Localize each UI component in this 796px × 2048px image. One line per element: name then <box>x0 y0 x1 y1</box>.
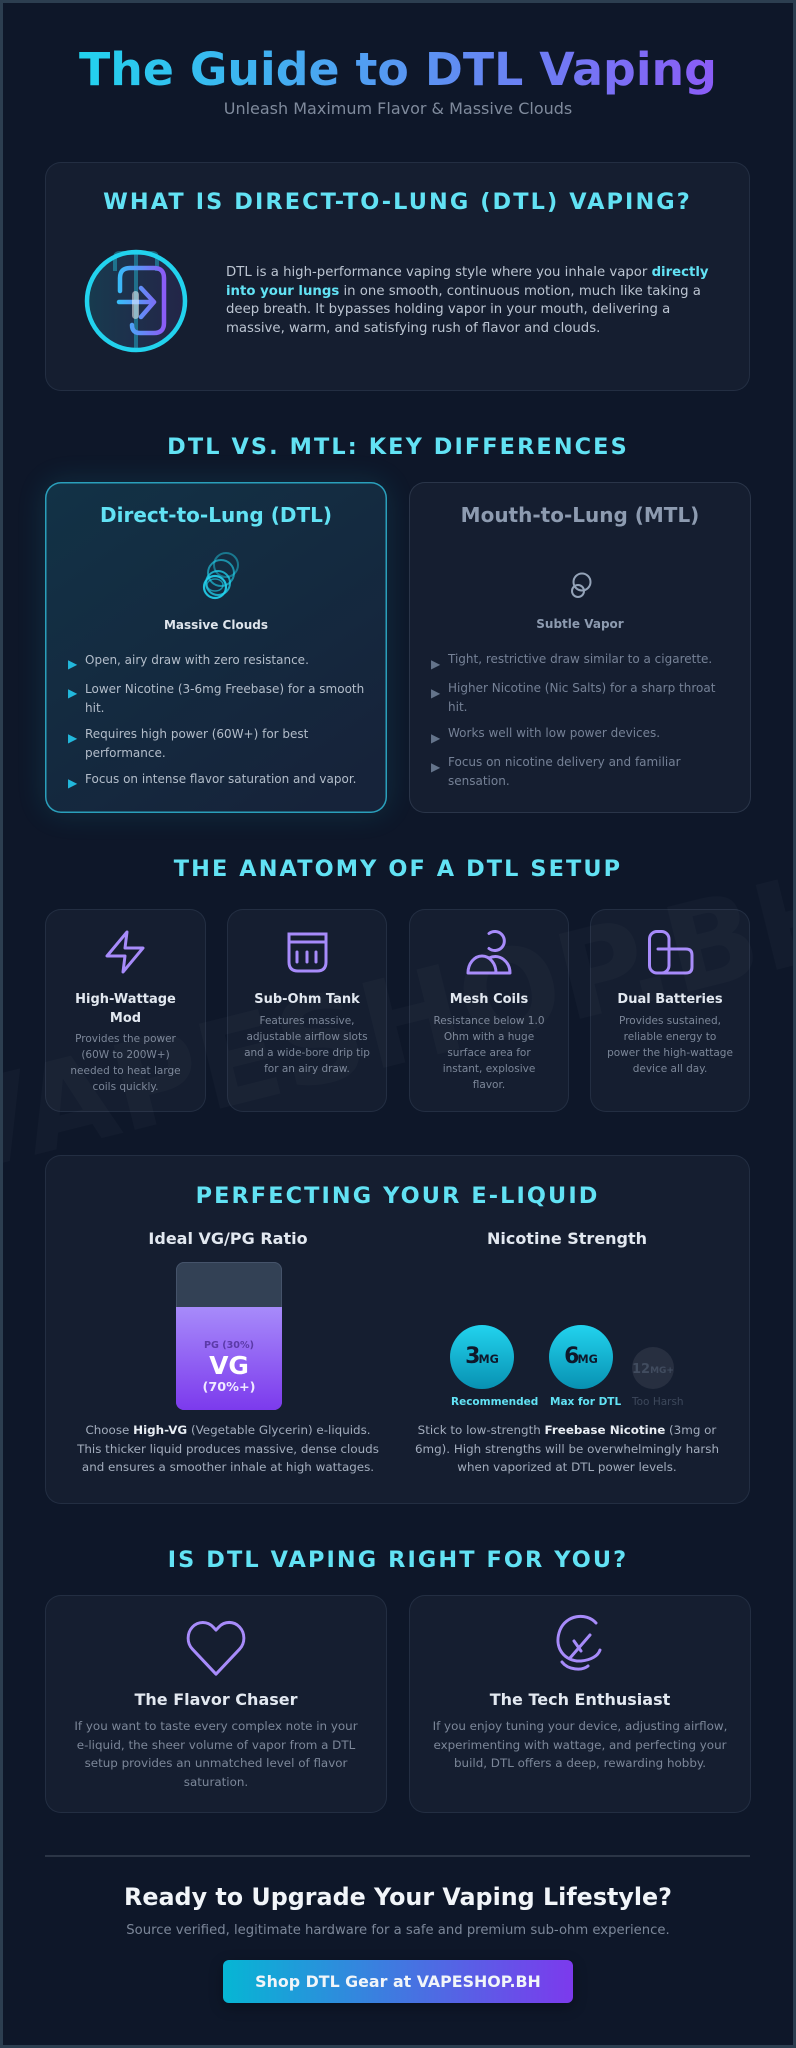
coils text: surface area for <box>447 1047 531 1059</box>
MTL bullet list: sensation. <box>448 774 510 788</box>
panel: what is DTL <box>45 162 750 391</box>
DTL bullet list: ▶ <box>68 657 77 671</box>
ratio text: and ensures a smoother inhale at high wattages. <box>82 1460 374 1474</box>
MTL bullet list: Focus on nicotine delivery and familiar <box>448 755 681 769</box>
ratio text: This thicker liquid produces massive, dense clouds <box>77 1442 379 1456</box>
subtle vapor label: Subtle Vapor <box>536 617 624 631</box>
DTL bullet list: ▶ <box>68 731 77 745</box>
mod title: High-Wattage <box>75 992 176 1007</box>
nicotine heading: Nicotine Strength <box>487 1229 647 1248</box>
subtitle: Unleash Maximum Flavor & Massive Clouds <box>224 99 572 118</box>
flavor text: e-liquid, the sheer volume of vapor from a DTL <box>77 1738 355 1752</box>
MTL title: Mouth-to-Lung (MTL) <box>461 503 699 527</box>
title: The Guide to DTL Vaping <box>79 42 717 96</box>
mod text <box>70 1033 181 1093</box>
panel: DTL card <box>45 482 387 813</box>
icon: batteries <box>648 930 694 974</box>
ratio text: Choose High-VG (Vegetable Glycerin) e-liquids. <box>85 1423 371 1437</box>
CTA text: Source verified, legitimate hardware for a safe and premium sub-ohm experience. <box>126 1923 670 1938</box>
tank text <box>244 1015 370 1075</box>
massive clouds label: Massive Clouds <box>164 618 268 632</box>
heading: what is DTL: WHAT IS DIRECT-TO-LUNG (DTL) VAPING? <box>103 189 692 215</box>
DTL bullet list: performance. <box>85 746 166 760</box>
flavor text <box>74 1719 358 1789</box>
nicotine 3mg <box>450 1325 514 1389</box>
MTL bullet list <box>431 652 716 788</box>
mod text: coils quickly. <box>93 1081 158 1093</box>
tech title: The Tech Enthusiast <box>490 1690 670 1709</box>
mod text: needed to heat large <box>70 1065 181 1077</box>
intro text: deep breath. It bypasses holding vapor in your mouth, delivering a <box>226 302 670 317</box>
coils text: instant, explosive <box>443 1063 535 1075</box>
panel: MTL card <box>409 482 751 813</box>
mod text: (60W to 200W+) <box>81 1049 170 1061</box>
mod title <box>75 992 176 1026</box>
MTL bullet list: ▶ <box>431 657 440 671</box>
DTL bullet list <box>68 653 364 790</box>
nicotine 12mg <box>632 1347 674 1389</box>
MTL bullet list: ▶ <box>431 731 440 745</box>
tech text: build, DTL offers a deep, rewarding hobby. <box>454 1756 706 1770</box>
nicotine text <box>415 1423 719 1474</box>
ratio text <box>77 1423 379 1474</box>
panel: high-wattage mod <box>45 909 206 1112</box>
icon: massive clouds <box>202 552 239 600</box>
coils text: Ohm with a huge <box>444 1031 534 1043</box>
heading: differences: DTL VS. MTL: KEY DIFFERENCES <box>167 434 629 460</box>
heading: right for you: IS DTL VAPING RIGHT FOR YOU? <box>168 1547 628 1573</box>
MTL bullet list: Works well with low power devices. <box>448 726 660 740</box>
CTA button <box>223 1960 573 2003</box>
DTL bullet list: hit. <box>85 701 104 715</box>
batteries text: reliable energy to <box>624 1031 716 1043</box>
nicotine text: 6mg). High strengths will be overwhelmingly harsh <box>415 1442 719 1456</box>
nicotine 12mg: 12MG+ <box>632 1362 674 1377</box>
panel: dual batteries <box>590 909 750 1112</box>
divider <box>45 1855 750 1857</box>
tech text <box>433 1719 727 1770</box>
nicotine labels <box>451 1396 684 1408</box>
intro text: DTL is a high-performance vaping style where you inhale vapor directly <box>226 265 709 280</box>
batteries text: power the high-wattage <box>607 1047 733 1059</box>
nicotine labels: Max for DTL <box>550 1396 621 1408</box>
nicotine labels: Recommended <box>451 1396 538 1408</box>
panel: flavor chaser <box>45 1595 387 1813</box>
DTL title: Direct-to-Lung (DTL) <box>100 503 332 527</box>
coils title: Mesh Coils <box>450 992 528 1007</box>
VG fill <box>176 1307 282 1410</box>
MTL bullet list: Tight, restrictive draw similar to a cigarette. <box>448 652 712 666</box>
tech text: experimenting with wattage, and perfecting your <box>433 1738 727 1752</box>
ratio heading: Ideal VG/PG Ratio <box>148 1229 308 1248</box>
icon: heart <box>186 1620 246 1676</box>
tank text: and a wide-bore drip tip <box>244 1047 370 1059</box>
flavor text: If you want to taste every complex note in your <box>74 1719 358 1733</box>
mod title: Mod <box>110 1010 141 1026</box>
nicotine 6mg: 6MG <box>564 1344 598 1369</box>
tech text: If you enjoy tuning your device, adjusting airflow, <box>433 1719 727 1733</box>
intro text: into your lungs in one smooth, continuous motion, much like taking a <box>226 284 701 299</box>
MTL bullet list: ▶ <box>431 686 440 700</box>
nicotine text: when vaporized at DTL power levels. <box>457 1460 677 1474</box>
MTL bullet list: ▶ <box>431 760 440 774</box>
MTL bullet list: Higher Nicotine (Nic Salts) for a sharp throat <box>448 681 715 695</box>
nicotine labels: Too Harsh <box>632 1396 684 1408</box>
panel: sub-ohm tank <box>227 909 387 1112</box>
DTL bullet list: Requires high power (60W+) for best <box>85 727 308 741</box>
icon: tank <box>288 932 328 972</box>
CTA heading: Ready to Upgrade Your Vaping Lifestyle? <box>124 1883 672 1911</box>
icon: coils <box>466 930 512 974</box>
mod text: Provides the power <box>75 1033 176 1045</box>
VG label: VG <box>209 1351 249 1380</box>
coils text: Resistance below 1.0 <box>433 1015 544 1027</box>
flavor text: setup provides an unmatched level of flavor <box>85 1756 347 1770</box>
panel: tech enthusiast <box>409 1595 751 1813</box>
PG label: PG (30%) <box>204 1340 254 1351</box>
icon: gauge <box>556 1614 602 1671</box>
DTL bullet list: Open, airy draw with zero resistance. <box>85 653 309 667</box>
panel: mesh coils <box>409 909 569 1112</box>
VG percent: (70%+) <box>202 1380 256 1395</box>
coils text <box>433 1015 544 1091</box>
nicotine 6mg <box>549 1325 613 1389</box>
DTL bullet list: Lower Nicotine (3-6mg Freebase) for a smooth <box>85 682 364 696</box>
icon: subtle vapor <box>571 572 592 598</box>
tank text: for an airy draw. <box>264 1063 350 1075</box>
intro text <box>226 265 709 336</box>
tank title: Sub-Ohm Tank <box>254 992 360 1007</box>
batteries text: device all day. <box>633 1063 707 1075</box>
DTL bullet list: ▶ <box>68 686 77 700</box>
DTL bullet list: Focus on intense flavor saturation and vapor. <box>85 772 356 786</box>
DTL bullet list: ▶ <box>68 776 77 790</box>
intro text: massive, warm, and satisfying rush of flavor and clouds. <box>226 321 600 336</box>
bottle chart <box>176 1262 282 1410</box>
icon: bolt <box>105 930 145 974</box>
heading: anatomy: THE ANATOMY OF A DTL SETUP <box>174 856 622 882</box>
flavor text: saturation. <box>184 1775 248 1789</box>
tank text: Features massive, <box>259 1015 355 1027</box>
icon: lung inhale device <box>84 250 188 352</box>
nicotine text: Stick to low-strength Freebase Nicotine (3mg or <box>418 1423 716 1437</box>
batteries text: Provides sustained, <box>619 1015 721 1027</box>
batteries text <box>607 1015 733 1075</box>
MTL bullet list: hit. <box>448 700 467 714</box>
nicotine 3mg: 3MG <box>465 1344 499 1369</box>
flavor title: The Flavor Chaser <box>134 1690 298 1709</box>
tank text: adjustable airflow slots <box>246 1031 368 1043</box>
coils text: flavor. <box>473 1079 505 1091</box>
batteries title: Dual Batteries <box>617 992 723 1007</box>
panel: e-liquid <box>45 1155 750 1504</box>
heading: e-liquid: PERFECTING YOUR E-LIQUID <box>196 1183 599 1209</box>
CTA button: Shop DTL Gear at VAPESHOP.BH <box>255 1972 541 1991</box>
